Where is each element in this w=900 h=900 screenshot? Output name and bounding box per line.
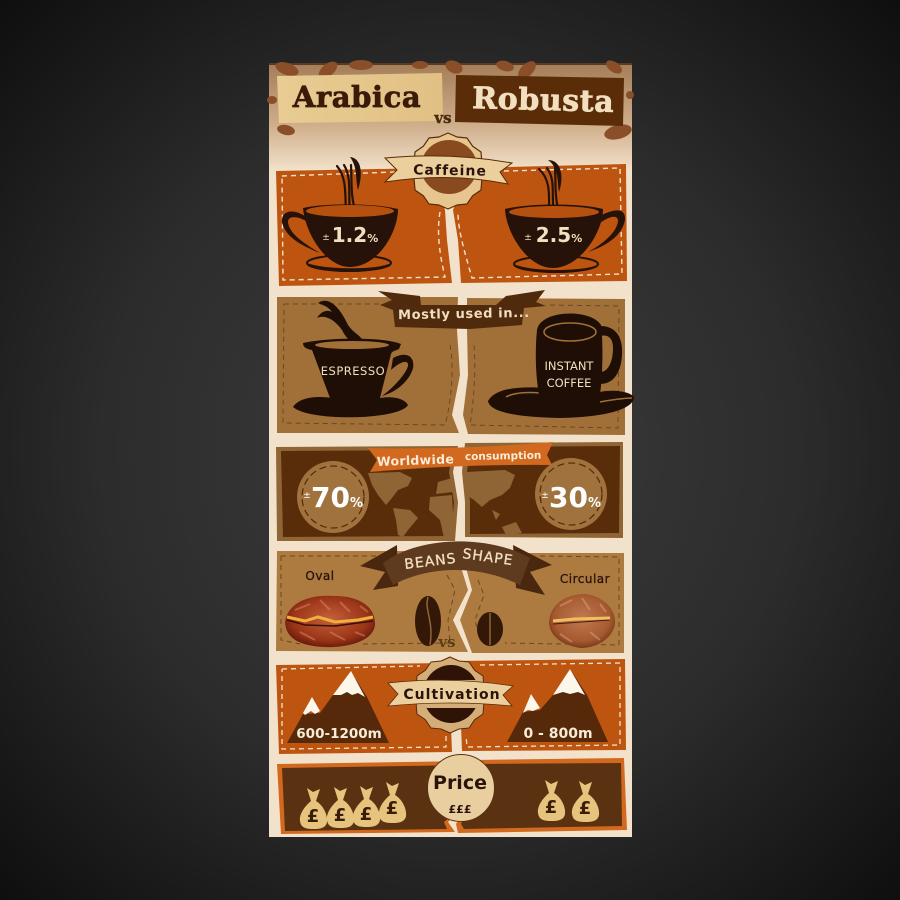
label: Oval: Oval <box>305 569 335 583</box>
icon: money bag 2: £ <box>334 805 346 826</box>
icon: mountain 600-1200m: 600-1200m <box>296 726 382 742</box>
panel: caffeine left <box>276 168 452 286</box>
world map left <box>368 472 454 538</box>
stitches right <box>475 556 619 645</box>
icon: steaming cup 1.2% <box>282 157 398 272</box>
stitches left <box>282 666 446 749</box>
icon: money bag 3 <box>353 786 380 827</box>
icon: mountain 600-1200m <box>287 671 389 743</box>
label: ESPRESSO: ESPRESSO <box>321 364 385 378</box>
value prefix: ± <box>322 233 330 243</box>
banner: BEANS SHAPE: BEANS <box>404 551 457 573</box>
banner: Worldwide consumption <box>368 442 553 472</box>
icon: money bag 2 <box>327 787 354 828</box>
stitches right <box>466 663 620 747</box>
panel: consumption right <box>462 442 623 538</box>
icon: money bag 1: £ <box>307 806 319 827</box>
photo: circular coffee bean <box>549 594 615 648</box>
panel: beans shape left <box>276 551 468 652</box>
badge: Price: Price <box>433 772 487 794</box>
panel: price left <box>277 761 470 834</box>
banner: Mostly used in <box>378 290 546 329</box>
banner: Worldwide consumption: Worldwide <box>377 451 454 469</box>
value prefix: ± <box>541 491 549 501</box>
panel: beans shape right <box>460 553 624 653</box>
banner: BEANS SHAPE: SHAPE <box>461 546 514 569</box>
icon: mountain 0-800m: 0 - 800m <box>523 726 593 742</box>
icon: money bag 3: £ <box>360 804 372 825</box>
title: Arabica <box>277 73 443 123</box>
value: 30%: 30% <box>549 481 601 514</box>
panel: beans shape <box>276 541 624 653</box>
badge: Caffeine: Caffeine <box>413 162 487 180</box>
icon: money bag 6 <box>572 781 599 822</box>
world map right <box>466 470 522 535</box>
banner: Mostly used in: Mostly used in... <box>398 306 530 323</box>
badge: Caffeine <box>385 133 512 209</box>
panel: consumption left <box>276 446 458 541</box>
stat circle 70% <box>297 461 369 533</box>
panel: cultivation <box>276 657 626 754</box>
icon: money bag 5 <box>538 780 565 821</box>
panel: price right <box>456 758 627 833</box>
panel: mostly used in <box>277 290 634 435</box>
icon: money bag 5: £ <box>545 797 557 818</box>
label: Circular: Circular <box>560 572 610 586</box>
vs label: vs <box>433 109 452 127</box>
decorative coffee beans at top <box>267 58 634 142</box>
panel: cultivation left <box>276 663 452 754</box>
panel: mostly used in right <box>463 298 625 435</box>
vs label beans: vs <box>437 633 456 651</box>
photo: oval coffee bean <box>285 596 375 647</box>
badge: Price: £££ <box>449 803 471 816</box>
badge: Cultivation: Cultivation <box>403 687 501 703</box>
panel: caffeine right <box>453 164 627 283</box>
panel: price <box>277 754 627 834</box>
title: Arabica: Arabica <box>292 80 421 114</box>
icon: mountain 0-800m <box>507 669 608 742</box>
title: Robusta: Robusta <box>472 81 615 120</box>
label: INSTANT: INSTANT <box>545 359 594 373</box>
stat circle 30% <box>535 458 607 530</box>
badge: Price <box>428 754 494 822</box>
stitches: left panel <box>283 304 452 425</box>
value prefix: ± <box>303 491 311 501</box>
icon: steaming cup 2.5% <box>505 160 625 273</box>
poster <box>269 63 632 837</box>
stitches: right panel <box>470 305 619 428</box>
value prefix: ± <box>524 233 532 243</box>
banner: Worldwide consumption: consumption <box>465 450 541 463</box>
icon: money bag 4: £ <box>386 798 398 819</box>
icon: money bag 1 <box>300 788 327 829</box>
title: Robusta <box>455 75 624 126</box>
panel: caffeine <box>276 133 627 286</box>
icon: espresso cup <box>293 301 413 417</box>
value: 1.2%: 1.2% <box>332 223 378 247</box>
icon: oval bean <box>415 596 441 646</box>
badge: Cultivation <box>388 657 513 733</box>
label: COFFEE: COFFEE <box>547 376 591 390</box>
icon: round bean <box>477 612 503 646</box>
panel: cultivation right <box>452 659 626 751</box>
value: 2.5%: 2.5% <box>536 223 582 247</box>
panel: mostly used in left <box>277 297 460 433</box>
banner: BEANS SHAPE <box>360 541 552 595</box>
icon: money bag 4 <box>379 782 406 823</box>
icon: money bag 6: £ <box>579 798 591 819</box>
panel: worldwide consumption <box>276 442 623 541</box>
icon: instant coffee mug <box>488 314 634 418</box>
value: 70%: 70% <box>311 481 363 514</box>
stitches <box>281 556 455 644</box>
